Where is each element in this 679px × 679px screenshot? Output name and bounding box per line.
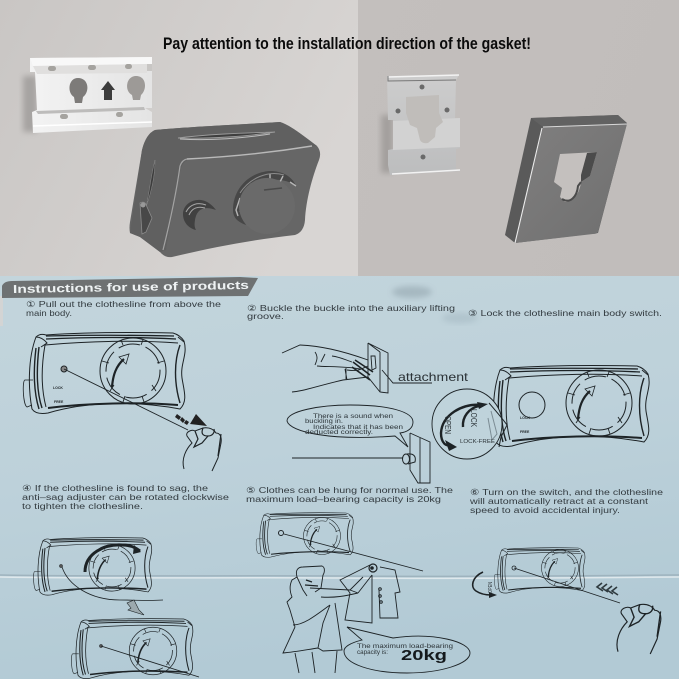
step 1 illustration: pulling line from body: FREE [54,400,64,404]
step 1 text [26,299,221,318]
step 5 illustration: woman hanging clothes [256,513,423,673]
step 5 text: maximum load–bearing capacity is 20kg [246,494,441,504]
callout: buckling sound: buckling in. [305,419,343,425]
step 2 text [247,303,455,321]
step 6 text: speed to avoid accidental injury. [470,505,620,515]
step 3 illustration: lock switch dial: LOCK [469,409,478,428]
step 2 text: ② Buckle the buckle into the auxiliary lifting [247,303,455,313]
step 5 text: ⑤ Clothes can be hung for normal use. The [246,485,453,495]
step 6 text: ⑥ Turn on the switch, and the clothesline [470,487,663,497]
step 1 illustration: pulling line from body: LOCK [53,386,63,390]
callout: maximum load 20kg: 20kg [401,647,447,664]
photo panel: right wall background [358,0,679,277]
step 5 text [246,485,453,504]
step 3 illustration: lock switch dial: OPEN [443,416,452,434]
panel: instruction sheet [0,276,679,679]
step 4 text [22,483,229,511]
step 2 illustration: buckle and attachment [282,343,432,393]
icon: aluminium rail with up arrow [23,57,152,133]
callout: maximum load 20kg [344,627,470,673]
heading band: instructions title [2,277,258,298]
callout: buckling sound [287,405,430,483]
step 1 text: main body. [26,308,72,318]
step 3 text: ③ Lock the clothesline main body switch. [468,308,662,318]
step 6 text [469,487,663,515]
icon: grey clothesline dispenser body [130,122,320,257]
step 4 text: ④ If the clothesline is found to sag, the [22,483,208,493]
step 3 illustration: lock switch dial: LOCK-FREE [460,439,495,445]
callout: buckling sound: deducted correctly. [305,430,373,436]
callout: maximum load 20kg: capacity is: [357,650,388,656]
callout: buckling sound: There is a sound when [313,414,393,420]
icon: keyhole bracket on wall [381,75,461,175]
step 2 text: groove. [247,311,284,321]
step 6 illustration: automatic retraction [473,548,661,654]
callout: buckling sound: Indicates that it has been [313,425,403,431]
step 4 text: anti–sag adjuster can be rotated clockwise [22,492,229,502]
step 6 text: will automatically retract at a constant [469,496,649,506]
step 6 illustration: automatic retraction: OPEN [488,582,494,593]
step 3 illustration: lock switch dial [432,365,649,459]
step 4 text: to tighten the clothesline. [22,501,143,511]
heading band: instructions title: Instructions for use of products [13,280,249,296]
step 1 illustration: pulling line from body [23,332,221,471]
step 1 text: ① Pull out the clothesline from above the [26,299,221,309]
heading: gasket direction warning: Pay attention to the installation direction of the gasket! [163,34,531,53]
step 4 illustration: rotating adjuster [34,538,199,679]
label: attachment: attachment [398,370,469,384]
photo panel: left wall background [0,0,358,277]
callout: maximum load 20kg: The maximum load-bearing [357,644,453,650]
step 3 illustration: lock switch dial: LOCK [520,416,530,420]
step 3 illustration: lock switch dial: FREE [520,430,530,434]
icon: dark gasket plate [505,115,627,243]
